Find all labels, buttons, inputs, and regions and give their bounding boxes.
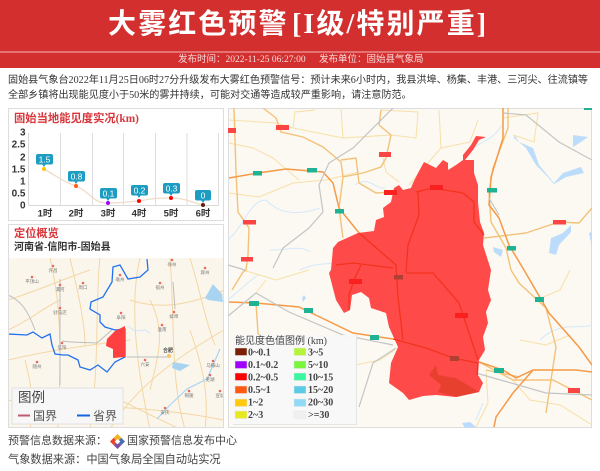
location map: 宿州 [156, 284, 165, 291]
road shields [228, 108, 592, 393]
warning text: 全部乡镇将出现能见度小于50米的雾并持续，可能对交通等造成较严重影响，请注意防范。 [8, 90, 412, 100]
visibility legend [233, 335, 357, 425]
title: 大雾红色预警 [108, 9, 289, 40]
minor roads [229, 108, 592, 427]
legend swatches: 20~30 [308, 398, 333, 408]
rivers and lakes [302, 135, 592, 428]
location map: 铜陵 [184, 392, 194, 399]
publish info [178, 54, 424, 65]
line chart: 1 [20, 176, 26, 188]
location map: 安庆 [160, 409, 170, 416]
location heading: 定位概览 [14, 228, 59, 240]
data source line 2: 气象数据来源：中国气象局全国自动站实况 [8, 454, 221, 466]
legend swatches [234, 348, 333, 421]
line chart: 6时 [196, 208, 211, 220]
legend swatches: 10~15 [308, 372, 333, 384]
line chart: 2.5 [12, 140, 26, 150]
panel: visibility chart [8, 108, 224, 221]
location map [9, 258, 224, 427]
title: [I级/特别严重] [292, 9, 488, 40]
railways [228, 108, 592, 407]
location map: 阜阳 [116, 314, 126, 321]
legend box: 国界 [33, 409, 57, 423]
data source line 1 [8, 434, 237, 449]
legend box: 省界 [93, 409, 117, 423]
location map: 漯河 [56, 286, 65, 292]
warning text: 固始县气象台2022年11月25日06时27分升级发布大雾红色预警信号：预计未来6小时内，我县洪埠、杨集、丰港、三河尖、往流镇等 [8, 75, 588, 86]
location name: 河南省-信阳市-固始县 [14, 242, 111, 253]
legend swatches: >=30 [308, 410, 329, 421]
location map: 徐州 [168, 261, 177, 268]
darker area and roads in warning zone [336, 188, 484, 397]
line chart: 0.5 [12, 188, 26, 200]
legend swatches: 3~5 [308, 348, 323, 358]
location map: 滁州 [200, 269, 210, 276]
location map: 信阳 [58, 344, 67, 351]
location map: 周口 [78, 285, 88, 291]
line chart: 0 [20, 200, 26, 212]
line chart [12, 128, 219, 220]
line chart: 0 [201, 190, 206, 200]
line chart: 4时 [132, 208, 147, 220]
location map: 芜湖 [206, 376, 215, 383]
header banner [0, 0, 600, 68]
location map: 随州 [32, 363, 42, 370]
legend title: 能见度色值图例 (km) [235, 336, 327, 347]
location map: 蚌埠 [170, 313, 179, 320]
panel: location overview [8, 224, 224, 428]
legend swatches: 0~0.1 [248, 348, 271, 358]
title [108, 9, 488, 40]
line chart: 3 [20, 128, 26, 138]
warning area polygon [329, 136, 491, 400]
chart heading: 固始当地能见度实况(km) [14, 113, 139, 125]
publish info: 发布时间：2022-11-25 06:27:00 [178, 55, 306, 65]
line chart: 5时 [164, 208, 179, 220]
highways [232, 108, 592, 413]
line chart: 2 [20, 152, 26, 164]
legend swatches: 1~2 [248, 398, 263, 408]
location map: 平顶山 [25, 278, 39, 285]
expressways [229, 108, 592, 427]
line chart: 0.1 [103, 188, 115, 198]
location map: 合肥 [163, 347, 173, 354]
location map: 亳州 [116, 276, 125, 283]
province border [8, 259, 148, 372]
location map: 淮南 [158, 326, 167, 333]
legend swatches: 5~10 [308, 360, 328, 371]
icon: publisher logo [110, 434, 125, 449]
line chart: 0.3 [166, 184, 178, 194]
legend swatches: 0.2~0.5 [248, 372, 278, 384]
legend swatches: 0.5~1 [248, 385, 271, 396]
line chart: 3时 [101, 208, 116, 220]
line chart: 2时 [69, 208, 84, 220]
data source line 1: 预警信息数据来源： [8, 435, 107, 447]
legend box [12, 388, 123, 424]
line chart: 1.5 [39, 154, 51, 164]
legend swatches: 15~20 [308, 385, 333, 396]
line chart: 0.2 [134, 186, 146, 196]
legend swatches: 0.1~0.2 [248, 360, 278, 371]
location map: 驻马店 [53, 309, 67, 316]
location map: 六安 [140, 361, 150, 368]
location map: 马鞍山 [206, 362, 220, 369]
publish info: 发布单位：固始县气象局 [319, 55, 424, 65]
line chart: 1时 [38, 208, 53, 220]
warning text [8, 74, 588, 100]
county highlight [106, 326, 125, 358]
data source line 1: 国家预警信息发布中心 [127, 435, 237, 447]
legend box: 图例 [18, 390, 45, 405]
location map: 许昌 [48, 267, 58, 274]
line chart: 1.5 [12, 164, 26, 176]
legend swatches: 2~3 [248, 410, 263, 421]
panel: main map [228, 108, 592, 428]
line chart: 0.8 [71, 172, 83, 182]
